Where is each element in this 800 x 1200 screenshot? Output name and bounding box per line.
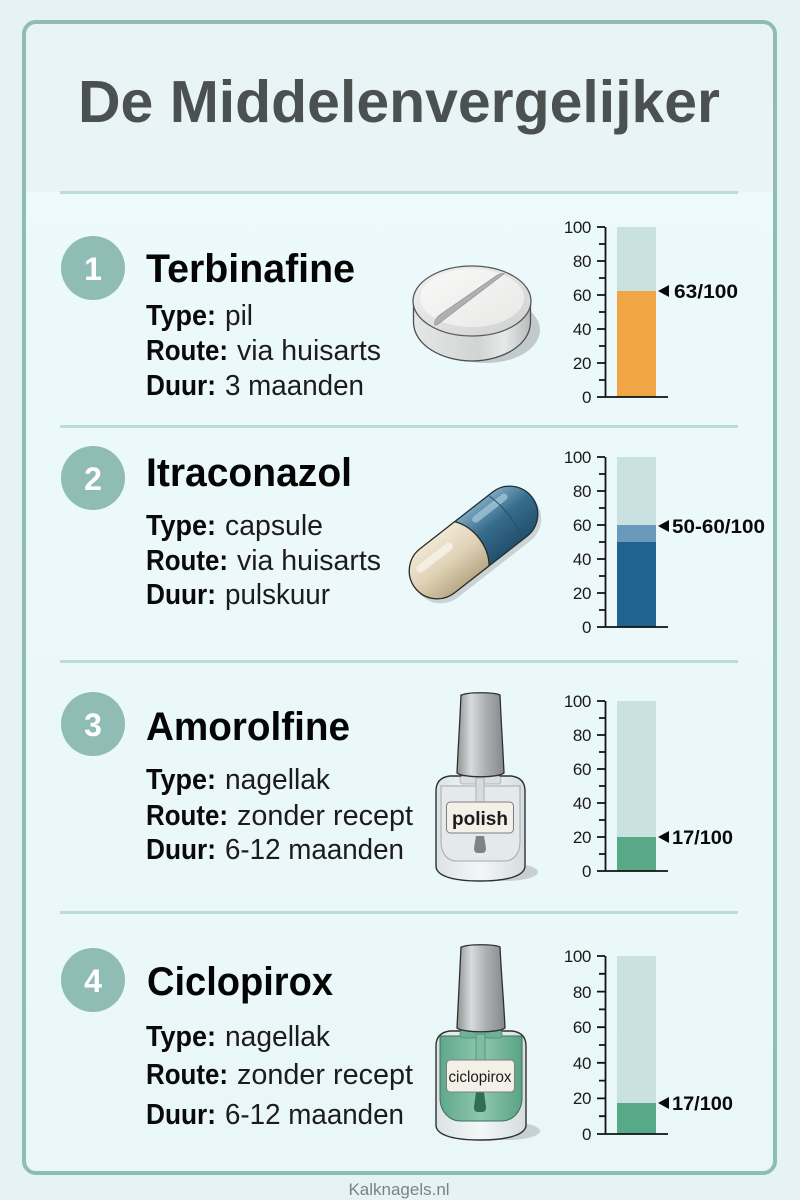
panel: Ciclopirox	[61, 945, 733, 1144]
details: Itraconazol: capsule	[225, 510, 323, 542]
details: Terbinafine: via huisarts	[237, 335, 381, 367]
details: Itraconazol: pulskuur	[225, 579, 330, 611]
bar chart: 50-60/100: 100	[564, 448, 591, 467]
details: Ciclopirox: Type:	[146, 1021, 216, 1053]
details: Itraconazol: via huisarts	[237, 545, 381, 577]
number badge 3: 3	[84, 707, 102, 743]
details: Terbinafine	[146, 300, 381, 402]
heading: Ciclopirox: Ciclopirox	[147, 960, 333, 1004]
bar chart: 17/100 ciclopirox: 0	[582, 1125, 591, 1144]
bar chart: 63/100	[564, 218, 738, 407]
bar chart: 17/100 amorolfine: 100	[564, 692, 591, 711]
icon: green ciclopirox bottle: ciclopirox	[448, 1069, 512, 1086]
bar chart: 17/100 amorolfine: 40	[573, 794, 591, 813]
panel: Itraconazol	[61, 446, 765, 637]
details: Amorolfine: Type:	[146, 764, 216, 796]
footer credit: Kalknagels.nl	[348, 1180, 450, 1199]
icon: clear polish bottle	[436, 693, 538, 881]
heading: Terbinafine: Terbinafine	[146, 247, 355, 291]
details: Itraconazol: Duur:	[146, 579, 216, 611]
bar chart: 63/100: 0	[582, 388, 591, 407]
number badge 1	[61, 236, 125, 300]
bar chart: 63/100: 63/100	[674, 282, 738, 303]
bar chart: 17/100 ciclopirox: 100	[564, 947, 591, 966]
bar chart: 50-60/100: 60	[573, 516, 591, 535]
heading: Amorolfine: Amorolfine	[146, 705, 350, 749]
details: Terbinafine: Type:	[146, 300, 216, 332]
bar chart: 17/100 amorolfine: 60	[573, 760, 591, 779]
number badge 2: 2	[84, 461, 102, 497]
bar chart: 17/100 ciclopirox: 17/100	[672, 1094, 733, 1115]
bar chart: 63/100: 40	[573, 320, 591, 339]
bar chart: 50-60/100: 50-60/100	[672, 517, 765, 538]
bar chart: 17/100 ciclopirox	[564, 947, 733, 1144]
number badge 3	[61, 692, 125, 756]
bar chart: 17/100 amorolfine: 20	[573, 828, 591, 847]
details: Amorolfine: nagellak	[225, 764, 331, 796]
bar chart: 50-60/100	[564, 448, 765, 637]
bar chart: 17/100 amorolfine: 80	[573, 726, 591, 745]
details: Amorolfine: Route:	[146, 800, 228, 832]
bar chart: 63/100: 80	[573, 252, 591, 271]
details: Ciclopirox: 6-12 maanden	[225, 1099, 404, 1131]
bar chart: 50-60/100: 20	[573, 584, 591, 603]
number badge 4	[61, 948, 125, 1012]
icon: capsule	[398, 475, 553, 615]
bar chart: 63/100: 20	[573, 354, 591, 373]
panel: Amorolfine	[61, 692, 733, 881]
details: Ciclopirox	[146, 1021, 413, 1131]
bar chart: 17/100 amorolfine	[564, 692, 733, 881]
bar chart: 17/100 amorolfine: 17/100	[672, 828, 733, 849]
details: Ciclopirox: zonder recept	[237, 1059, 413, 1091]
details: Amorolfine: Duur:	[146, 834, 216, 866]
title: De Middelenvergelijker	[78, 68, 720, 135]
icon: clear polish bottle: polish	[452, 809, 508, 830]
heading: Itraconazol: Itraconazol	[146, 451, 352, 495]
bar chart: 50-60/100: 0	[582, 618, 591, 637]
bar chart: 63/100: 60	[573, 286, 591, 305]
number badge 1: 1	[84, 251, 102, 287]
number badge 2	[61, 446, 125, 510]
details: Terbinafine: Route:	[146, 335, 228, 367]
bar chart: 17/100 ciclopirox: 60	[573, 1018, 591, 1037]
bar chart: 50-60/100: 80	[573, 482, 591, 501]
details: Amorolfine: zonder recept	[237, 800, 413, 832]
panel: Terbinafine	[61, 218, 738, 407]
number badge 4: 4	[84, 963, 102, 999]
details: Terbinafine: Duur:	[146, 370, 216, 402]
details: Ciclopirox: nagellak	[225, 1021, 331, 1053]
details: Ciclopirox: Route:	[146, 1059, 228, 1091]
bar chart: 63/100: 100	[564, 218, 591, 237]
details: Terbinafine: pil	[225, 300, 253, 332]
bar chart: 17/100 ciclopirox: 40	[573, 1054, 591, 1073]
details: Amorolfine	[146, 764, 413, 866]
details: Itraconazol	[146, 510, 381, 611]
bar chart: 17/100 ciclopirox: 80	[573, 983, 591, 1002]
icon: green ciclopirox bottle	[436, 945, 540, 1140]
bar chart: 17/100 ciclopirox: 20	[573, 1089, 591, 1108]
details: Ciclopirox: Duur:	[146, 1099, 216, 1131]
details: Amorolfine: 6-12 maanden	[225, 834, 404, 866]
bar chart: 17/100 amorolfine: 0	[582, 862, 591, 881]
icon: white tablet	[413, 266, 540, 363]
details: Terbinafine: 3 maanden	[225, 370, 364, 402]
details: Itraconazol: Type:	[146, 510, 216, 542]
bar chart: 50-60/100: 40	[573, 550, 591, 569]
details: Itraconazol: Route:	[146, 545, 228, 577]
